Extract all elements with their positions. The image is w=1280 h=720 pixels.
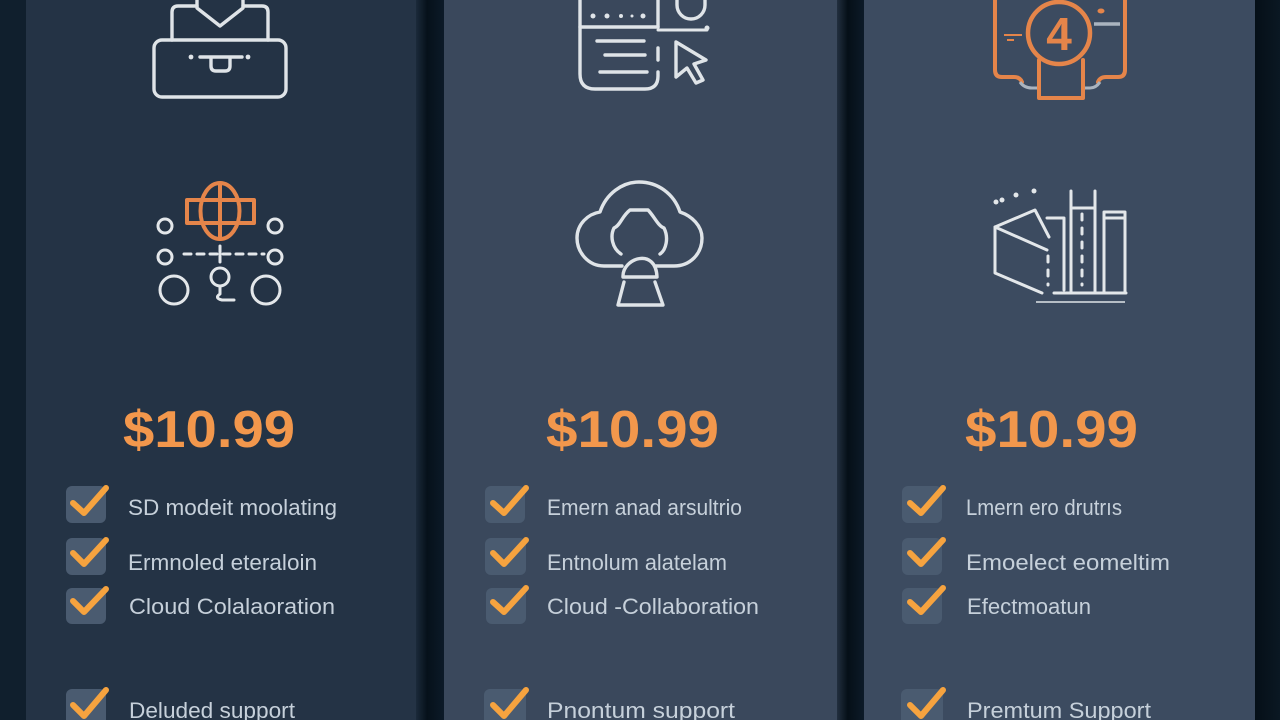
feature: row two: Entnolum alatelam (547, 550, 727, 575)
panel: middle plan (444, 0, 837, 720)
feature: row two (902, 538, 1170, 575)
icon: orange badge with number (995, 0, 1125, 98)
feature: support (484, 689, 735, 720)
right panel background (864, 0, 1255, 720)
feature: 3D modeling: SD modeit moolating (128, 495, 337, 520)
feature: support (66, 689, 295, 720)
feature: support (901, 689, 1151, 720)
feature: row one: Lmern ero drutrıs (966, 495, 1122, 520)
feature: row two (485, 538, 727, 575)
feature: rendering: Ermnoled eteraloin (128, 550, 317, 575)
feature: row two: Emoelect eomeltim (966, 550, 1170, 575)
icon: orange badge with number: 4 (1046, 8, 1072, 60)
feature: row three (902, 588, 1091, 624)
middle panel background (444, 0, 837, 720)
feature: cloud collaboration (486, 588, 759, 624)
feature: cloud collaboration: Cloud Colalaoration (129, 594, 335, 619)
feature: row three: Efectmoatun (967, 594, 1091, 619)
icon: books (994, 188, 1126, 302)
icon: app window and cursor (580, 0, 710, 89)
icon: briefcase with shield (154, 0, 286, 97)
price: $10.99 (965, 401, 1138, 459)
feature: row one: Emern anad arsultrio (547, 495, 742, 520)
feature: row one (485, 486, 742, 523)
panel: left plan (26, 0, 416, 720)
left panel background (26, 0, 416, 720)
icon: globe network (158, 183, 282, 304)
feature: rendering (66, 538, 317, 575)
feature: cloud collaboration: Cloud -Collaboration (547, 594, 759, 619)
icon: cloud (577, 182, 702, 305)
feature: cloud collaboration (66, 588, 335, 624)
price: $10.99 (123, 401, 295, 459)
panel: right plan (864, 0, 1255, 720)
feature: 3D modeling (66, 486, 337, 523)
feature: row one (902, 486, 1122, 523)
price: $10.99 (546, 401, 719, 459)
